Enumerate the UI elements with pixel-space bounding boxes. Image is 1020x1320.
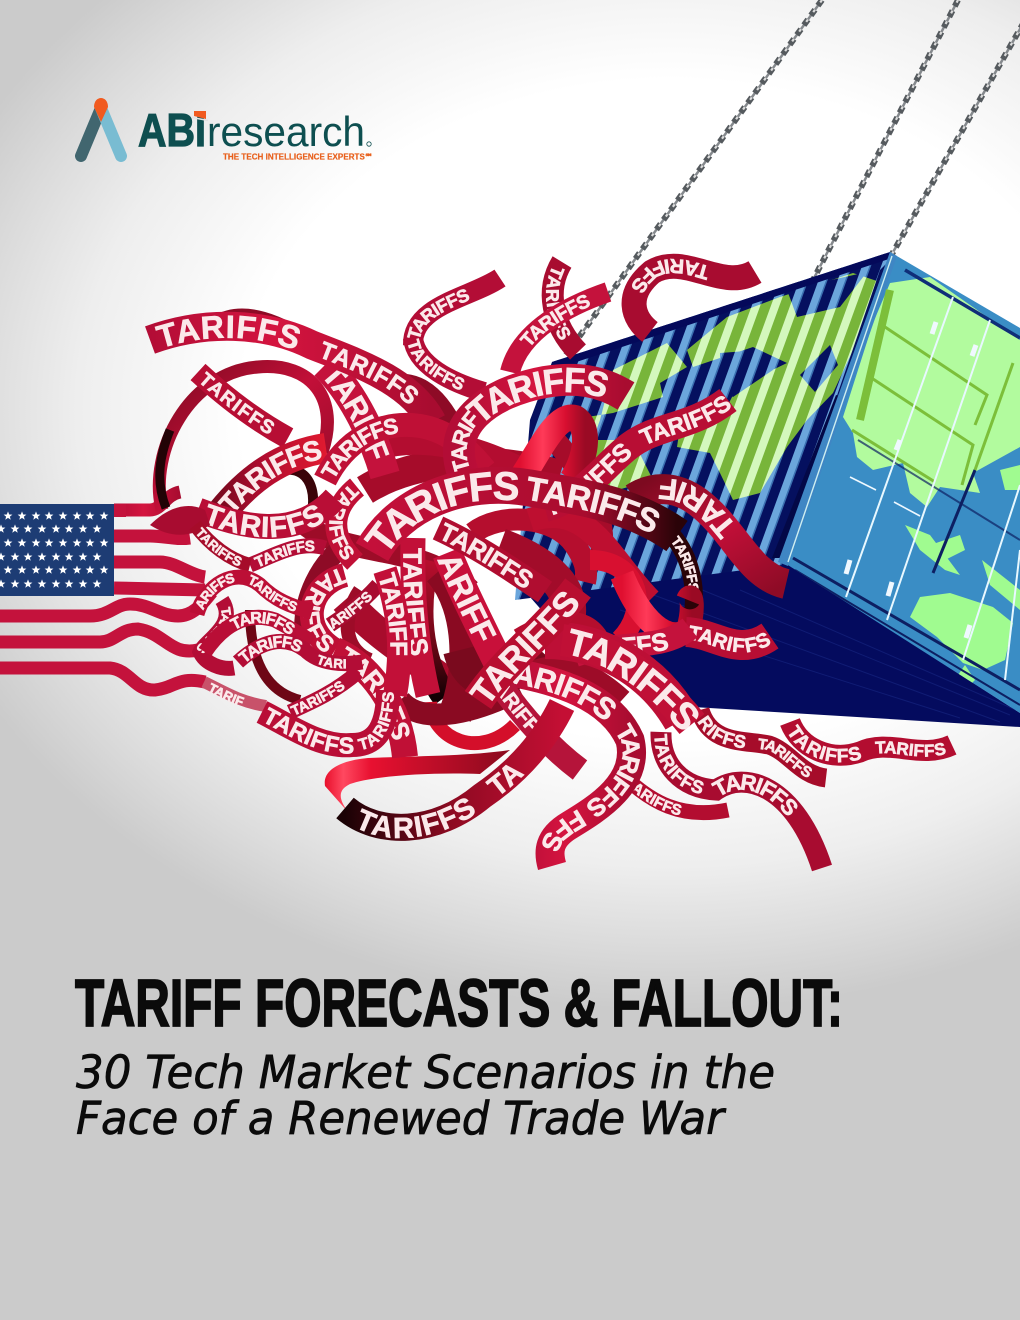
ribbon: TARIFFS middle left: TARIFFS	[200, 499, 330, 544]
ribbon: bright red right loop	[622, 575, 692, 634]
subtitle	[76, 1046, 775, 1145]
ribbon: long lower tentacle	[650, 732, 832, 872]
ribbon: left curl with TARIFFS: TARIFFS	[303, 568, 348, 652]
ribbon: TARIFFS descending pink	[497, 682, 588, 780]
ribbon: far lower right tentacle: TARIFFS	[788, 724, 862, 763]
Australia and islands on door	[905, 465, 1020, 690]
ribbon: long S-curve TARIFFS going down: FFS	[542, 809, 587, 852]
ribbon: top centre tentacle, upper half: TARIFFS	[406, 289, 470, 338]
ribbon: top centre tentacle, upper half	[403, 270, 506, 346]
ribbon: small left loop: TARIFFS	[246, 572, 299, 615]
ribbon: main TARIFFS TARIFFS	[358, 464, 677, 562]
tangled tariff ribbons	[145, 254, 956, 872]
ribbon: big TARIFFS top centre: TARIFFS	[464, 368, 608, 421]
ribbon fold beside flag	[150, 506, 210, 535]
bright swoosh of lower ribbon	[325, 750, 510, 812]
container side panel with map	[515, 252, 890, 600]
ribbon: small TARI low: TARIFFS	[236, 634, 305, 667]
ribbon: TARIFFS bottom left: TARIFFS	[357, 691, 398, 754]
canton stars	[0, 511, 108, 588]
ribbon: TARIFFS descending pink: ARIFFS	[500, 686, 538, 729]
ribbon: small TARIFFS left center	[198, 610, 316, 656]
ribbon: TARIFFS lower right on navy: TARIFFS	[690, 625, 770, 653]
ribbon: large TARIFFS right front: TARIFFS	[570, 628, 698, 730]
ribbon: lower right tentacle	[694, 707, 828, 788]
ribbon: TARIFFS bottom left: TARIFFS	[259, 702, 354, 759]
ribbon: dark thin TARIFFS: TARIFFS	[672, 535, 699, 589]
ribbon: right TARIFFS over container: TARIFFS	[552, 444, 632, 516]
ribbon: small TARI low	[236, 634, 362, 671]
ribbon: main TARIFFS TARIFFS: TARIFFS	[523, 469, 666, 541]
ribbon: long lower tentacle: TARIFFS	[710, 774, 798, 816]
subtitle: 30 Tech Market Scenarios in the	[76, 1046, 775, 1099]
ribbon: TARIFFS upper centre arc: TARIFFS	[320, 418, 398, 476]
ribbon: TARIFFS centre diagonal: TARIFFS	[442, 522, 533, 588]
shipping container	[500, 240, 1020, 730]
door frame and lock rods	[793, 270, 1020, 705]
ribbon: right upside-down TARIFFS: TARIF	[658, 478, 733, 540]
Eurasia on door	[843, 277, 1020, 507]
subtitle: Face of a Renewed Trade War	[76, 1092, 726, 1145]
ribbon: top crossing TARIFFS: TARIFFS	[519, 294, 590, 346]
container underside	[515, 560, 1020, 727]
ribbon: TARIFFS vertical near centre: TARIFFS	[324, 480, 362, 564]
ribbon: small left loop: ARIFFS	[192, 570, 236, 612]
logo: ABI Research: research	[207, 108, 365, 155]
ribbon: long S-curve TARIFFS going down	[513, 662, 646, 870]
dark background ribbon arcs	[159, 314, 650, 743]
ribbon: top vertical TARIFFS	[542, 256, 586, 360]
ribbon: TARIFFS large diagonal foreground: TARIFFS	[468, 592, 578, 702]
ribbon: top centre tentacle, lower half: TARIFFS	[408, 338, 464, 390]
ribbon: right upside-down TARIFFS	[626, 474, 790, 599]
ribbon: upper right tentacle: TARIFFS	[632, 258, 708, 293]
flag stripes dissolving into ribbons	[0, 492, 266, 706]
ribbon: right TARIFFS over container	[552, 389, 736, 516]
ribbon: lower right tentacle: TARIFFS	[758, 738, 812, 778]
container doors with map	[788, 252, 1020, 713]
logo: ABI Research	[81, 98, 373, 162]
logo tagline: THE TECH INTELLIGENCE EXPERTS℠	[223, 152, 373, 162]
ribbon: TARIFFS left arc: TARIFFS	[217, 440, 322, 510]
ribbon: TARIFFS bottom swoop: TA	[485, 764, 525, 794]
ribbon: big TARIFFS top centre: TARIF	[451, 410, 476, 472]
ribbon: TARIFFS TARIFFS top left	[145, 312, 445, 418]
ribbon: small left curl: TARIFFS	[193, 606, 234, 657]
ribbon: TARIFFS behind, vertical: TARIFF	[324, 370, 390, 459]
american flag	[0, 492, 266, 706]
ribbon: TARIFFS low diagonal: TARIFFS	[288, 677, 347, 718]
ribbon: top vertical TARIFFS: TARIFFS	[546, 268, 570, 340]
ribbon: ARIF large vertical: ARIFF	[437, 558, 497, 641]
ribbon: small left curl	[192, 596, 236, 676]
ribbon: long lower tentacle: TARIFFS	[654, 734, 704, 794]
ribbon: TARIFFS diagonal left: TARIFFS	[200, 371, 274, 434]
ribbon: small tapered tail: ARIFFS	[633, 784, 682, 815]
ribbon: main TARIFFS TARIFFS: TARIFFS	[358, 464, 521, 562]
ribbon: ARIFF small inner: ARIFFS	[330, 592, 372, 630]
ribbon: small TARI low: TARI	[315, 652, 347, 671]
ribbon: faint tail with text	[204, 680, 266, 709]
ribbon: top crossing TARIFFS	[500, 282, 612, 374]
ribbon: long S-curve TARIFFS going down: ARIFFS	[513, 665, 616, 720]
ribbon: TARIFFS bottom left	[259, 690, 398, 759]
ribbon: centre vertical TARIFFS: TARIFFS	[403, 548, 428, 656]
ribbon: faint tail with text: TARIF	[206, 680, 246, 709]
ribbon: bright red loop	[520, 417, 585, 480]
ribbon: TARIFFS TARIFFS top left: TARIFFS	[322, 340, 418, 404]
ribbon: TARIFFS descending centre left: TARIFFS	[345, 646, 410, 740]
ribbon: far lower right tentacle: TARIFFS	[874, 740, 946, 757]
ribbon: small TARIFFS: TARIFFS	[253, 538, 315, 571]
ribbon: vertical TARIFFS centre-left	[374, 566, 412, 697]
ribbon: upper right tentacle	[622, 254, 762, 342]
ribbon: TARIFFS bottom swoop	[336, 699, 574, 841]
ribbon: right TARIFFS over container: TARIFFS	[638, 396, 731, 444]
ribbon: lower right tentacle: RIFFS	[697, 715, 746, 748]
ribbon: TARIFFS middle left	[199, 490, 342, 539]
ribbon: centre vertical TARIFFS	[400, 538, 440, 698]
ribbon: small TARIFFS left center: TARIFFS	[228, 610, 298, 639]
ribbon: FFS lower right	[578, 619, 698, 666]
ribbon: long S-curve TARIFFS going down: TARIFFS	[587, 722, 640, 816]
flag canton	[0, 504, 114, 596]
ribbon: large ribbon underlay running right	[545, 640, 682, 720]
ribbon: big TARIFFS top centre	[443, 364, 634, 474]
ribbon: TARIFFS bottom swoop: TARIFFS	[360, 798, 475, 838]
ribbon: small tapered tail	[632, 780, 730, 820]
ribbon: small left TARIFFS: TARIFFS	[193, 525, 244, 569]
ribbon: TARIFFS TARIFFS top left: TARIFFS	[154, 315, 300, 348]
ribbon: FFS lower right: IFFS	[622, 632, 668, 652]
ribbon: TARIFFS upper centre arc	[314, 412, 494, 486]
ribbon: far lower right tentacle	[780, 718, 956, 766]
logo icon	[81, 98, 121, 156]
sea channels on side panel	[720, 272, 867, 397]
ribbon: small left loop	[192, 570, 314, 620]
logo wordmark: ABI	[138, 104, 206, 156]
ribbon: vertical TARIFFS centre-left: TARIFF	[372, 570, 412, 656]
crane chains	[566, 0, 1020, 355]
